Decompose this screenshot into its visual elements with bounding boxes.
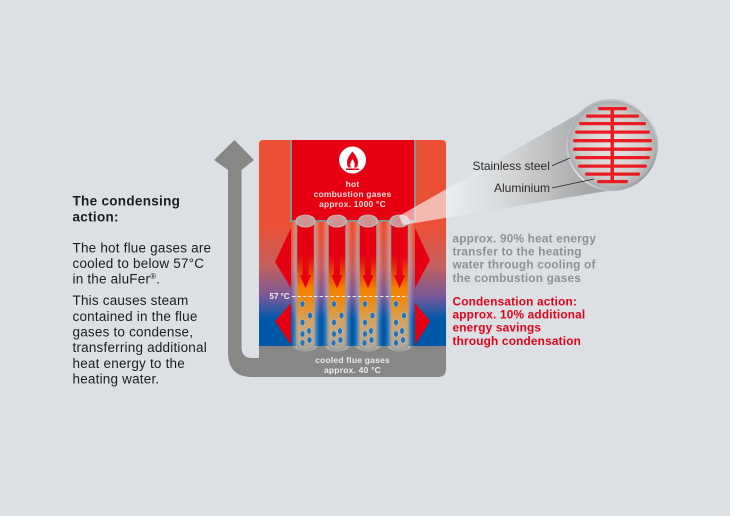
heat exchanger body gradient xyxy=(259,140,446,350)
text block: cooled below 57°C: in the aluFer xyxy=(72,272,150,286)
text block: steam condenses: heat energy to the xyxy=(72,356,185,371)
text block: condensation action: energy savings xyxy=(452,320,541,334)
tube 3 xyxy=(354,215,382,352)
arrow: flue gas exit xyxy=(214,140,270,377)
label: hot combustion gases: hot xyxy=(346,179,359,189)
magnification beam xyxy=(399,114,607,225)
text block: steam condenses: This causes steam xyxy=(72,293,188,308)
text block: condensation action: through condensation xyxy=(452,334,581,348)
text block: condensation action: Condensation action: xyxy=(452,294,577,308)
text block: 90% heat transfer: water through cooling of xyxy=(452,258,596,272)
text block: steam condenses: heating water. xyxy=(72,372,159,386)
icon: flame xyxy=(339,146,366,174)
text block: cooled below 57°C: cooled to below 57°C xyxy=(72,256,204,271)
label: aluminium: Aluminium xyxy=(494,181,550,195)
tube 1 xyxy=(291,215,320,352)
hot combustion chamber xyxy=(291,140,415,221)
text block: 90% heat transfer: approx. 90% heat energy xyxy=(452,232,596,246)
icon: tube cross section xyxy=(566,99,658,191)
label: cooled flue gases: approx. 40 °C xyxy=(324,365,381,375)
tube 2 xyxy=(322,215,352,352)
text block: cooled below 57°C: The hot flue gases are xyxy=(72,240,211,256)
text block: cooled below 57°C: . xyxy=(156,272,160,286)
text block: steam condenses: gases to condense, xyxy=(72,324,193,340)
label: 57 °C: 57 °C xyxy=(270,292,290,301)
57 degree dashed line xyxy=(292,296,408,298)
text block: 90% heat transfer: the combustion gases xyxy=(452,271,581,285)
label: hot combustion gases: approx. 1000 °C xyxy=(319,199,386,209)
aluminium fins xyxy=(573,107,652,183)
label: stainless steel: Stainless steel xyxy=(472,159,550,173)
cooled gas base xyxy=(259,346,446,377)
text block: 90% heat transfer: transfer to the heating xyxy=(452,244,582,258)
text block: steam condenses: transferring additional xyxy=(72,340,207,355)
label: aluminium xyxy=(494,179,594,195)
side triangles xyxy=(275,228,430,345)
label: cooled flue gases: cooled flue gases xyxy=(315,355,390,365)
heading: the condensing action: action: xyxy=(72,210,119,224)
text block: steam condenses: contained in the flue xyxy=(72,309,198,324)
heading: the condensing action: The condensing xyxy=(72,194,180,208)
text block: cooled below 57°C: ® xyxy=(150,272,156,281)
panel: heat exchanger xyxy=(259,140,446,377)
label: hot combustion gases: combustion gases xyxy=(314,189,391,199)
text block: condensation action: approx. 10% additional xyxy=(452,308,585,322)
tube 4 xyxy=(385,215,414,352)
